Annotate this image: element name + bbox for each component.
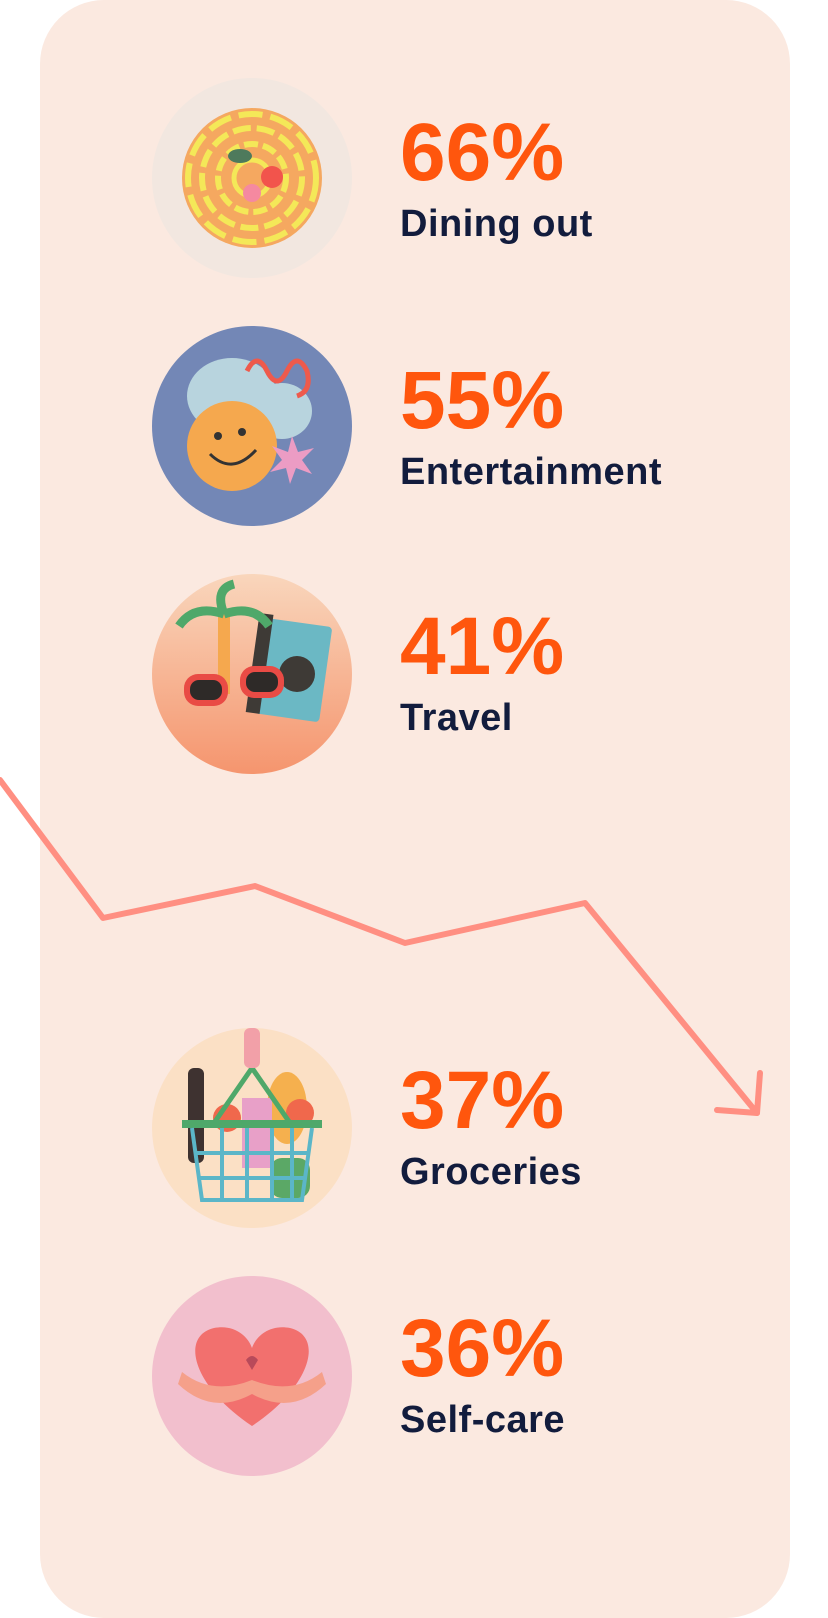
icon: travel <box>152 574 352 774</box>
stat: groceries: Groceries <box>400 1151 582 1193</box>
stat: self-care: 36% <box>400 1303 564 1394</box>
stat: groceries: 37% <box>400 1055 564 1146</box>
stat: self-care <box>400 1303 565 1441</box>
icon: groceries <box>152 1028 352 1228</box>
stat: self-care: Self-care <box>400 1399 565 1441</box>
stat: travel: Travel <box>400 697 513 739</box>
stat: travel <box>400 601 564 739</box>
icon: self-care <box>152 1276 352 1476</box>
stat: entertainment <box>400 355 662 493</box>
stat: dining out: Dining out <box>400 203 593 245</box>
stat: entertainment: 55% <box>400 355 564 446</box>
stat: dining out: 66% <box>400 107 564 198</box>
icon: entertainment <box>152 326 352 526</box>
stat: dining out <box>400 107 593 245</box>
stat: groceries <box>400 1055 582 1193</box>
stat: travel: 41% <box>400 601 564 692</box>
stat: entertainment: Entertainment <box>400 451 662 493</box>
icon: pasta <box>152 78 352 278</box>
